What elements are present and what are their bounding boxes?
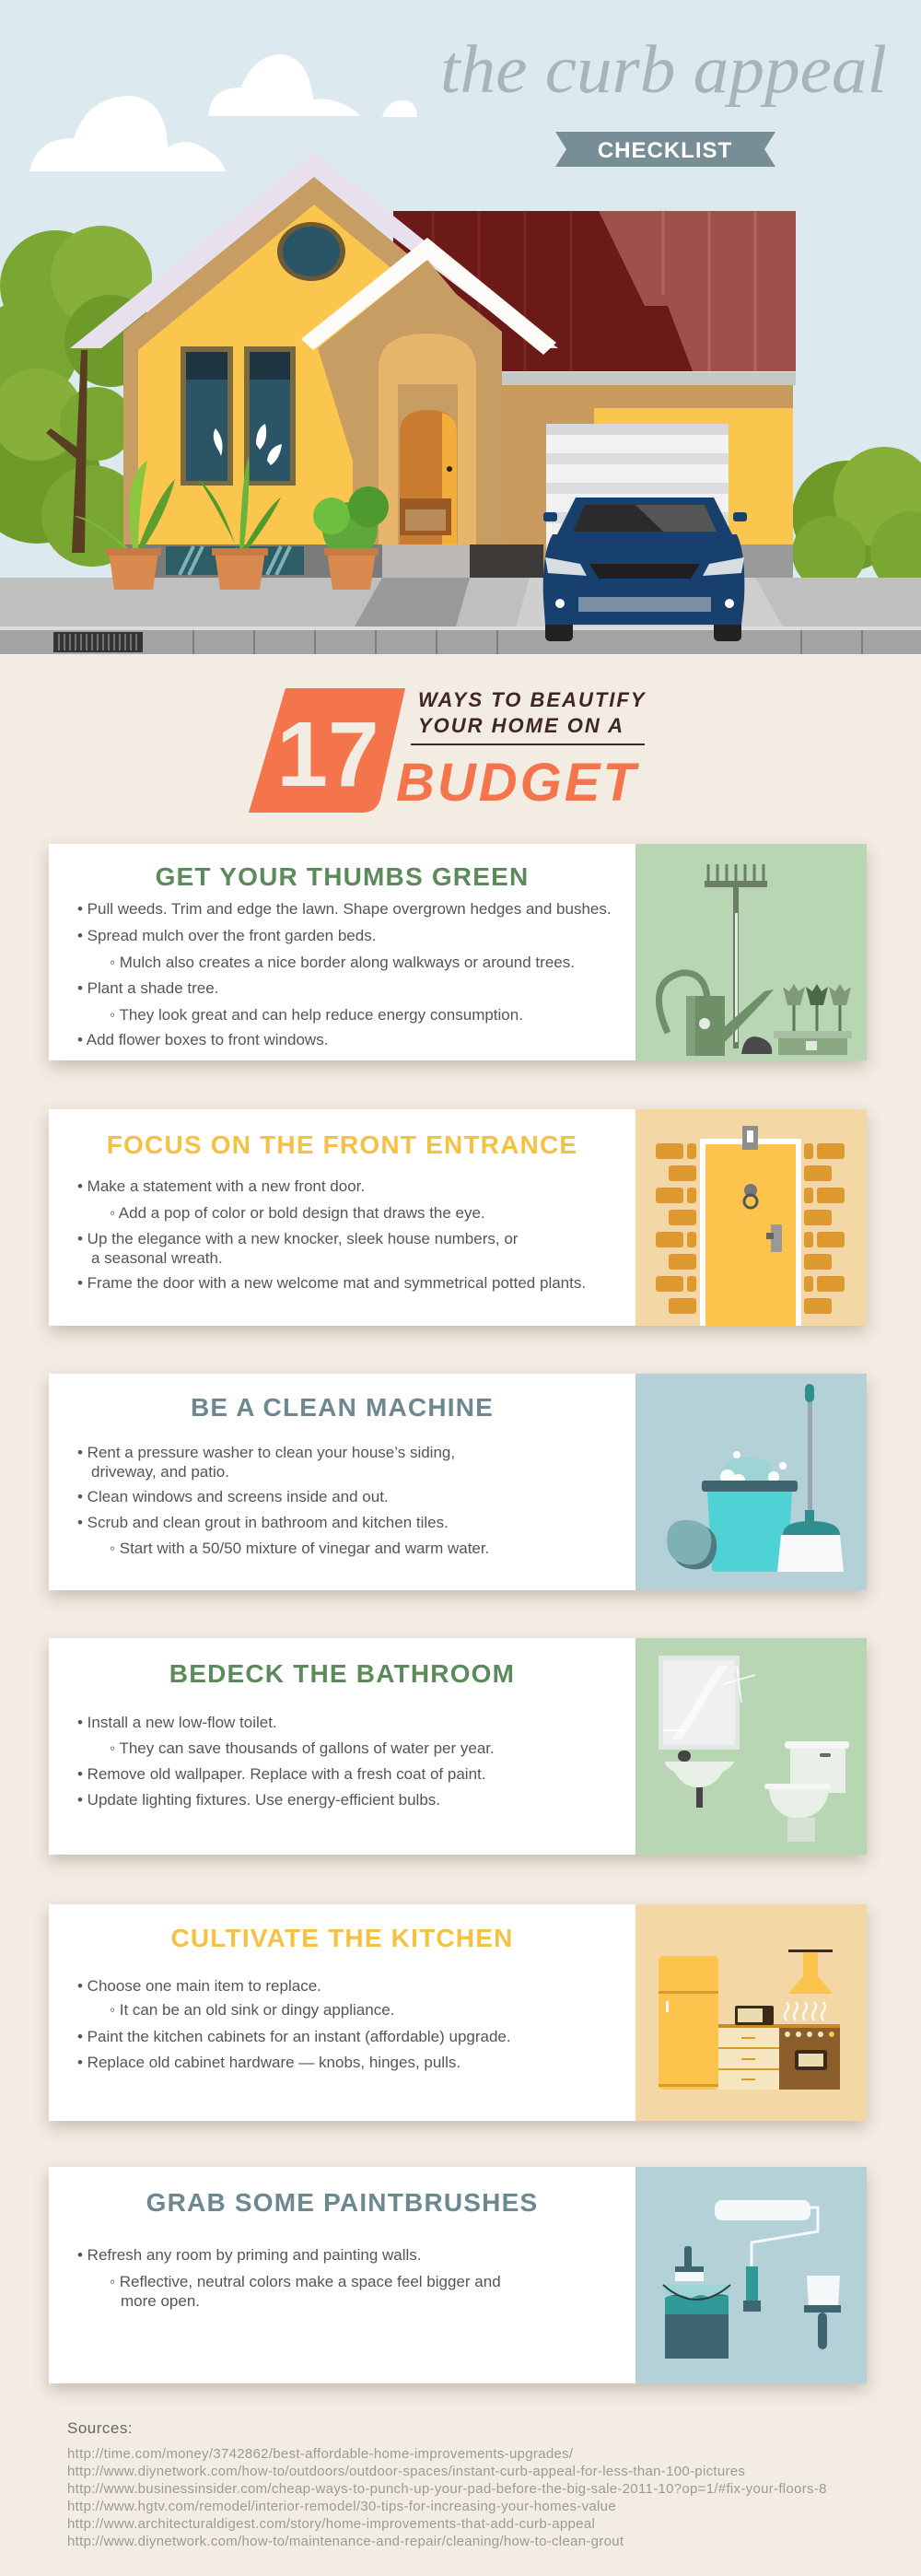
bullet list: • Rent a pressure washer to clean your house’s siding, bbox=[77, 1444, 455, 1461]
bullet list: • Refresh any room by priming and painting walls. bbox=[77, 2246, 422, 2264]
panel: focus on the front entrance bbox=[49, 1109, 867, 1326]
heading: BEDECK THE BATHROOM bbox=[169, 1659, 515, 1688]
bullet list: • Spread mulch over the front garden beds. bbox=[77, 927, 376, 944]
door bbox=[400, 410, 457, 544]
icon: sink and toilet bbox=[635, 1638, 867, 1855]
bullet list: • Clean windows and screens inside and out. bbox=[77, 1488, 389, 1505]
bullet list bbox=[77, 1444, 489, 1557]
bullet list: • Replace old cabinet hardware — knobs, hinges, pulls. bbox=[77, 2054, 460, 2071]
bullet list: • Frame the door with a new welcome mat and symmetrical potted plants. bbox=[77, 1274, 586, 1292]
panel: bedeck the bathroom bbox=[49, 1638, 867, 1855]
budget word: BUDGET bbox=[396, 753, 638, 813]
subtitle: YOUR HOME ON A bbox=[418, 714, 624, 737]
heading: FOCUS ON THE FRONT ENTRANCE bbox=[107, 1130, 577, 1159]
ribbon: checklist bbox=[555, 132, 775, 167]
icon: front door bbox=[635, 1109, 867, 1326]
bullet list: • Update lighting fixtures. Use energy-efficient bulbs. bbox=[77, 1791, 440, 1809]
clouds bbox=[29, 54, 417, 171]
left tree bbox=[0, 226, 157, 567]
bullet list: • Pull weeds. Trim and edge the lawn. Shape overgrown hedges and bushes. bbox=[77, 900, 612, 918]
heading: GRAB SOME PAINTBRUSHES bbox=[146, 2188, 538, 2217]
ribbon: checklist: CHECKLIST bbox=[598, 138, 732, 163]
sidewalk bbox=[0, 578, 921, 626]
bullet list: • Paint the kitchen cabinets for an instant (affordable) upgrade. bbox=[77, 2028, 511, 2045]
bullet list: driveway, and patio. bbox=[91, 1463, 229, 1481]
heading: GET YOUR THUMBS GREEN bbox=[156, 862, 529, 891]
bullet list: • Remove old wallpaper. Replace with a fresh coat of paint. bbox=[77, 1765, 485, 1783]
bullet list: ◦ Mulch also creates a nice border along walkways or around trees. bbox=[110, 954, 575, 971]
bullet list bbox=[77, 1177, 586, 1292]
sources bbox=[67, 2419, 827, 2549]
icon: paint supplies bbox=[635, 2167, 867, 2383]
bullet list: ◦ Add a pop of color or bold design that draws the eye. bbox=[110, 1204, 485, 1222]
garage door bbox=[546, 424, 729, 553]
heading: 17 ways to beautify your home on a budget bbox=[249, 688, 647, 813]
bullet list: ◦ Reflective, neutral colors make a space feel bigger and bbox=[110, 2273, 501, 2290]
bullet list: ◦ Start with a 50/50 mixture of vinegar and warm water. bbox=[110, 1540, 489, 1557]
sources: http://www.businessinsider.com/cheap-ways-to-punch-up-your-pad-before-the-big-sale-2011-10?op=1/#fix-your-floors-8 bbox=[67, 2481, 827, 2497]
sources: http://www.diynetwork.com/how-to/maintenance-and-repair/cleaning/how-to-clean-grout bbox=[67, 2534, 624, 2549]
badge: 17 bbox=[249, 688, 405, 813]
panel: grab some paintbrushes bbox=[49, 2167, 867, 2383]
bullet list: • Plant a shade tree. bbox=[77, 979, 218, 997]
porch gable bbox=[318, 260, 502, 544]
bullet list: ◦ They can save thousands of gallons of water per year. bbox=[110, 1739, 495, 1757]
bullet list: • Up the elegance with a new knocker, sleek house numbers, or bbox=[77, 1230, 518, 1247]
icon: garden tools bbox=[635, 844, 867, 1060]
sources: http://www.diynetwork.com/how-to/outdoors/outdoor-spaces/instant-curb-appeal-for-less-than-100-pictures bbox=[67, 2464, 745, 2479]
hero illustration bbox=[0, 0, 921, 654]
plants bbox=[74, 424, 389, 590]
bullet list bbox=[77, 900, 612, 1048]
heading: BE A CLEAN MACHINE bbox=[191, 1393, 494, 1422]
drain bbox=[53, 632, 143, 652]
bullet list: • Make a statement with a new front door. bbox=[77, 1177, 365, 1195]
subtitle: WAYS TO BEAUTIFY bbox=[418, 688, 647, 711]
subtitle bbox=[418, 688, 647, 737]
bullet list: • Scrub and clean grout in bathroom and kitchen tiles. bbox=[77, 1514, 449, 1531]
icon: kitchen bbox=[635, 1904, 867, 2121]
bullet list: ◦ They look great and can help reduce energy consumption. bbox=[110, 1006, 523, 1024]
panel: get your thumbs green bbox=[49, 844, 867, 1060]
bullet list: • Add flower boxes to front windows. bbox=[77, 1031, 328, 1048]
bullet list: • Install a new low-flow toilet. bbox=[77, 1714, 277, 1731]
bullet list: • Choose one main item to replace. bbox=[77, 1977, 321, 1995]
right bushes bbox=[792, 447, 921, 594]
icon: bucket and broom bbox=[635, 1374, 867, 1590]
badge: 17: 17 bbox=[276, 703, 379, 806]
panel: cultivate the kitchen bbox=[49, 1904, 867, 2121]
title: the curb appeal: the curb appeal bbox=[440, 32, 887, 108]
foundation bbox=[123, 544, 382, 578]
sources: http://www.architecturaldigest.com/story/home-improvements-that-add-curb-appeal bbox=[67, 2516, 595, 2532]
bullet list: ◦ It can be an old sink or dingy appliance. bbox=[110, 2001, 394, 2019]
garage roof bbox=[393, 211, 796, 371]
panel: be a clean machine bbox=[49, 1374, 867, 1590]
heading: CULTIVATE THE KITCHEN bbox=[170, 1924, 514, 1952]
sources: http://time.com/money/3742862/best-affordable-home-improvements-upgrades/ bbox=[67, 2446, 573, 2462]
windows bbox=[181, 346, 296, 486]
bullet list bbox=[77, 1977, 511, 2071]
main house bbox=[70, 152, 558, 348]
sources: http://www.hgtv.com/remodel/interior-remodel/30-tips-for-increasing-your-homes-value bbox=[67, 2499, 616, 2514]
sources: Sources: bbox=[67, 2419, 133, 2437]
bullet list: more open. bbox=[121, 2292, 200, 2310]
car bbox=[543, 498, 747, 641]
bullet list: a seasonal wreath. bbox=[91, 1249, 223, 1267]
bullet list bbox=[77, 1714, 495, 1809]
bullet list bbox=[77, 2246, 501, 2310]
